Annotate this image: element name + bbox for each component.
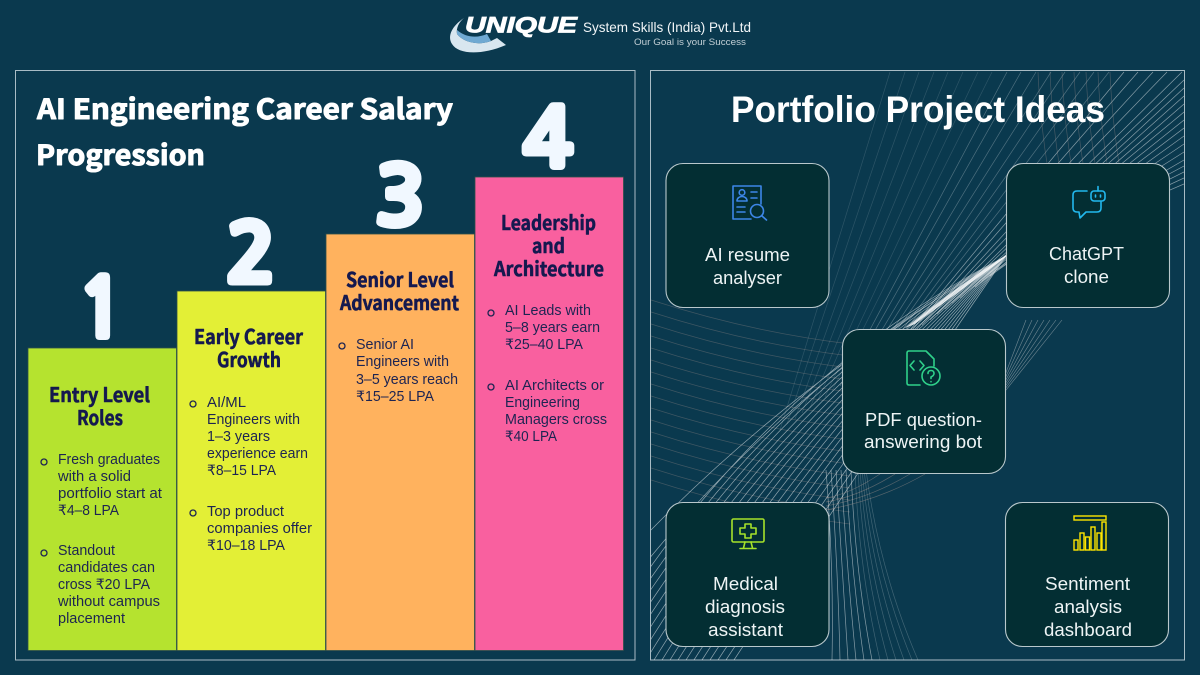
step 4 bullets: AI Architects or — [505, 378, 604, 394]
step 2 bullets: experience earn — [207, 446, 308, 462]
step 2 bullets: companies offer — [207, 521, 312, 537]
heading: salary progression: AI Engineering Career Salary — [36, 88, 453, 128]
step 4 bullets: Managers cross — [505, 412, 607, 428]
step 1 title — [49, 379, 150, 431]
card label: Sentiment — [1045, 573, 1130, 594]
step 4 bullets: ₹40 LPA — [505, 429, 557, 445]
step 4: leadership — [475, 100, 624, 650]
card label: clone — [1064, 266, 1109, 287]
card: AI resume analyser — [666, 164, 829, 308]
step 1 bullets: without campus — [57, 594, 160, 610]
step 1: entry level — [28, 270, 176, 650]
heading: salary progression: Progression — [36, 134, 205, 174]
card label: diagnosis — [705, 596, 785, 617]
number 2: 2 — [226, 214, 276, 294]
step 2 bullets: ₹8–15 LPA — [207, 463, 276, 479]
step 1 title: Entry Level — [49, 379, 150, 408]
step 1 bullets: placement — [58, 611, 125, 627]
card: Medical diagnosis assistant — [666, 502, 829, 646]
step 1 bullets: portfolio start at — [58, 486, 162, 502]
card label: ChatGPT — [1049, 243, 1124, 264]
icon: medical monitor — [732, 519, 764, 548]
step 1 bullets — [41, 452, 162, 627]
icon: resume search — [733, 186, 766, 220]
logo swoosh — [450, 18, 506, 52]
card: Sentiment analysis dashboard — [1006, 502, 1168, 646]
card label: answering bot — [864, 431, 982, 452]
step 1 title: Roles — [77, 402, 123, 431]
step 4 title: and — [532, 230, 565, 259]
step 4 bullets — [488, 303, 607, 445]
card label — [1049, 243, 1124, 287]
number 4: 4 — [523, 100, 573, 178]
card label — [1044, 573, 1132, 640]
icon: code document question — [907, 351, 940, 385]
step 2 bullets: 1–3 years — [207, 429, 270, 445]
step 3 bullets: Senior AI — [356, 337, 414, 353]
step 3 bullets: ₹15–25 LPA — [356, 389, 434, 405]
step 1 bullets: candidates can — [58, 560, 155, 576]
step 1 bullets: Fresh graduates — [58, 452, 160, 468]
card label — [864, 409, 982, 452]
heading: salary progression — [36, 88, 453, 174]
step 2 bullets — [190, 395, 312, 554]
step 1 bullets: cross ₹20 LPA — [58, 577, 150, 593]
step 2 title: Early Career — [194, 321, 303, 350]
step 2 title: Growth — [217, 344, 281, 373]
step 1 bullets: ₹4–8 LPA — [58, 503, 119, 519]
step 1 bullets: Standout — [58, 543, 115, 559]
step 2 bullets: Engineers with — [207, 412, 300, 428]
card label: dashboard — [1044, 619, 1132, 640]
icon: bar chart — [1074, 516, 1106, 550]
step 4 title — [493, 207, 604, 282]
logo wordmark: UNIQUE — [465, 12, 579, 38]
step 4 title: Architecture — [493, 253, 604, 282]
card label — [705, 573, 785, 640]
card label: PDF question- — [865, 409, 982, 430]
step 4 title: Leadership — [501, 207, 596, 236]
step 2 title — [194, 321, 303, 373]
step 3: senior level — [326, 158, 474, 650]
logo — [450, 12, 751, 52]
company name: System Skills (India) Pvt.Ltd — [583, 19, 751, 35]
step 1 bullets: with a solid — [57, 469, 131, 485]
number 1: 1 — [78, 270, 124, 348]
card label — [705, 244, 790, 288]
step 2 bullets: AI/ML — [207, 395, 246, 411]
number 3: 3 — [375, 158, 425, 236]
heading: portfolio project ideas: Portfolio Project Ideas — [731, 88, 1105, 130]
step 3 bullets: Engineers with — [356, 354, 449, 370]
card label: Medical — [713, 573, 778, 594]
step 3 bullets: 3–5 years reach — [356, 372, 458, 388]
step 2 bullets: ₹10–18 LPA — [207, 538, 285, 554]
card: ChatGPT clone — [1006, 164, 1170, 308]
step 4 bullets: AI Leads with — [505, 303, 591, 319]
step 3 title — [339, 264, 460, 316]
step 2 bullets: Top product — [207, 504, 284, 520]
card label: analysis — [1054, 596, 1122, 617]
step 4 bullets: Engineering — [505, 395, 580, 411]
step 4 bullets: 5–8 years earn — [505, 320, 600, 336]
step 3 title: Senior Level — [346, 264, 454, 293]
step 3 bullets — [339, 337, 458, 405]
icon: chat robot — [1073, 186, 1105, 218]
panel: portfolio project ideas — [590, 70, 1184, 660]
step 4 bullets: ₹25–40 LPA — [505, 337, 583, 353]
step 2: early career — [177, 214, 326, 650]
step 3 title: Advancement — [339, 287, 460, 316]
tagline: Our Goal is your Success — [634, 37, 747, 47]
panel: salary progression — [16, 70, 635, 660]
card: PDF question-answering bot — [842, 330, 1006, 474]
card label: assistant — [708, 619, 783, 640]
card label: AI resume — [705, 244, 790, 265]
card label: analyser — [713, 267, 782, 288]
